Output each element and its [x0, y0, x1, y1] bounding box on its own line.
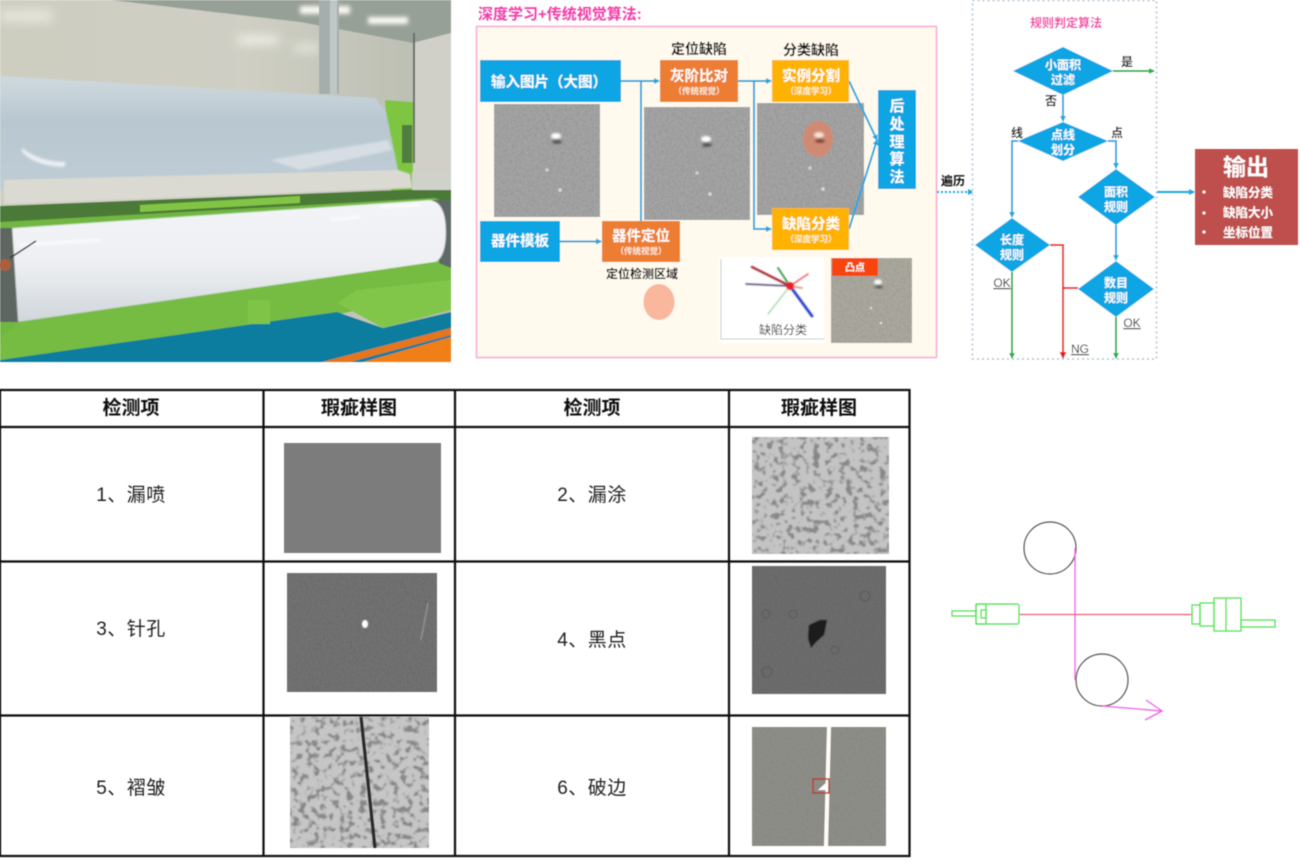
table header: 检测项	[102, 396, 160, 419]
box: instance segmentation: 实例分割	[782, 67, 840, 85]
roller: top	[1024, 522, 1076, 574]
sample image: input	[494, 104, 600, 217]
decision: small area filter: 过滤	[1051, 72, 1075, 87]
row label 1: 1、漏喷	[96, 484, 166, 506]
decision: count rule: 数目	[1104, 275, 1128, 290]
chart: defect classification scatter: 缺陷分类	[759, 322, 807, 337]
decision: area rule: 面积	[1104, 184, 1128, 199]
label: detection region: 定位检测区域	[606, 266, 678, 281]
sample image: grey comparison	[644, 107, 750, 220]
sample 1	[284, 443, 441, 553]
light beam	[1019, 614, 1193, 616]
box: post-processing: 后	[889, 98, 905, 115]
panel: output: 缺陷分类	[1223, 185, 1273, 200]
row label 3: 3、针孔	[96, 618, 166, 640]
box: post-processing: 法	[889, 168, 905, 186]
sample 2	[752, 437, 889, 554]
decision: point or line	[1018, 122, 1108, 161]
box: device location: 器件定位	[612, 227, 670, 245]
arrow: to output	[1157, 191, 1194, 193]
photo: film coating machine	[0, 0, 451, 362]
label: locate defects: 定位缺陷	[671, 41, 727, 57]
decision: point or line: 点线	[1051, 127, 1075, 142]
panel: output: 缺陷大小	[1223, 205, 1273, 220]
box: instance segmentation	[772, 60, 849, 102]
box: device template: 器件模板	[491, 232, 549, 250]
decision: small area filter: 小面积	[1045, 57, 1081, 72]
label: yes: 是	[1121, 55, 1133, 69]
label: OK left: OK	[993, 276, 1011, 290]
label: OK right: OK	[1123, 316, 1141, 330]
decision: count rule: 规则	[1104, 291, 1128, 305]
label: classify defects: 分类缺陷	[783, 42, 839, 58]
box: post-processing: 理	[889, 134, 905, 151]
panel: output: 坐标位置	[1223, 225, 1273, 240]
sample 6	[752, 727, 886, 846]
box: device location	[602, 221, 680, 262]
sample image: classified point: 凸点	[845, 261, 865, 274]
panel: output	[1195, 149, 1298, 245]
arrow: traverse: 遍历	[941, 173, 965, 188]
box: defect classification: （深度学习）	[785, 234, 837, 244]
arrows: flow connectors	[1012, 71, 1154, 358]
row label 6: 6、破边	[557, 777, 627, 799]
arrow: traverse	[937, 173, 973, 192]
box: grey comparison: （传统视觉）	[673, 86, 725, 96]
panel: output: 输出	[1223, 154, 1269, 180]
arrows: pipeline connectors	[560, 81, 877, 242]
row label 4: 4、黑点	[557, 629, 627, 651]
icon: region ellipse	[644, 284, 674, 320]
sample image: instance segmentation	[757, 103, 864, 215]
table header: 检测项	[563, 396, 621, 419]
label: line: 线	[1011, 125, 1023, 140]
light source	[952, 604, 1019, 624]
diagram: camera and rollers	[952, 522, 1275, 720]
decision: length rule: 长度	[1000, 232, 1024, 247]
sample 5	[290, 717, 429, 848]
table header: 瑕疵样图	[781, 396, 857, 419]
table: defect samples	[0, 390, 910, 856]
row label 5: 5、褶皱	[96, 777, 166, 799]
chart: defect classification scatter	[719, 257, 824, 343]
row label 2: 2、漏涂	[557, 484, 627, 506]
box: device template	[480, 221, 560, 262]
camera	[1192, 598, 1275, 631]
box: post-processing	[878, 90, 916, 189]
box: grey comparison	[660, 60, 738, 102]
sample image: classified point	[831, 258, 912, 343]
roller: bottom	[1076, 654, 1128, 706]
table header	[102, 396, 857, 419]
box: defect classification: 缺陷分类	[782, 215, 840, 233]
film path	[1075, 548, 1162, 720]
label: NG: NG	[1071, 342, 1089, 356]
panel: rule decision algorithm	[972, 0, 1156, 359]
box: post-processing: 处	[889, 115, 905, 133]
box: device location: （传统视觉）	[615, 246, 667, 256]
box: input image: 输入图片（大图）	[491, 73, 607, 91]
decision: area rule: 规则	[1104, 200, 1128, 214]
decision: area rule	[1078, 169, 1155, 225]
decision: count rule	[1078, 261, 1154, 317]
decision: small area filter	[1013, 47, 1113, 95]
decision: length rule: 规则	[1000, 248, 1024, 262]
table header: 瑕疵样图	[321, 396, 397, 419]
label: point: 点	[1111, 125, 1123, 140]
box: grey comparison: 灰阶比对	[670, 67, 728, 85]
heading: rule algorithm: 规则判定算法	[1030, 15, 1102, 30]
box: instance segmentation: （深度学习）	[785, 86, 837, 96]
sample 4	[752, 566, 886, 694]
decision: length rule	[975, 218, 1050, 272]
box: post-processing: 算	[889, 150, 905, 168]
heading: deep learning algorithm: 深度学习+传统视觉算法:	[478, 5, 642, 23]
sample 3	[287, 573, 437, 692]
decision: point or line: 划分	[1051, 142, 1075, 157]
box: input image	[480, 60, 621, 102]
label: no: 否	[1045, 94, 1057, 108]
box: defect classification	[772, 208, 849, 250]
panel: deep learning pipeline	[476, 26, 936, 358]
